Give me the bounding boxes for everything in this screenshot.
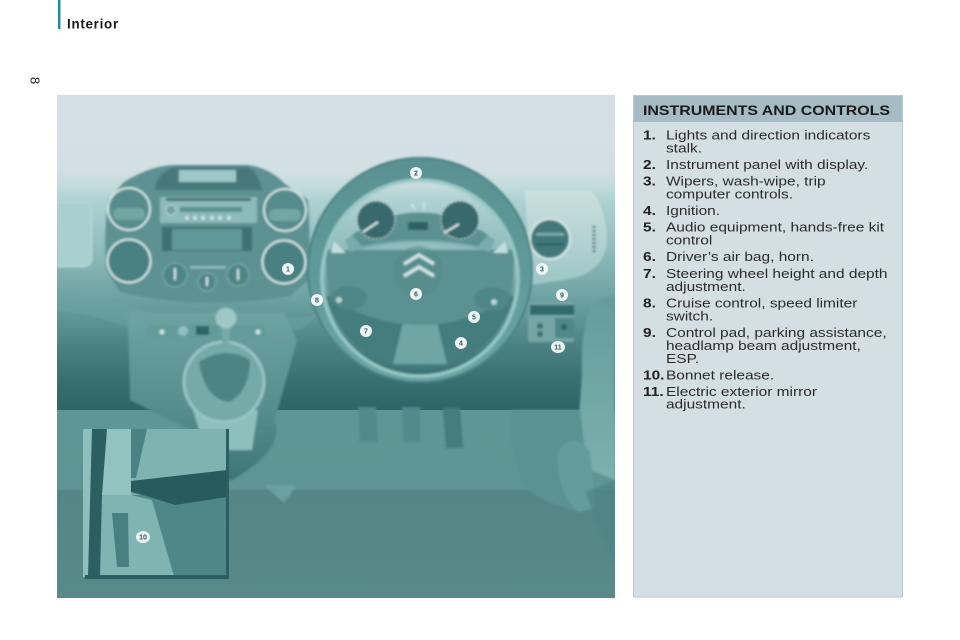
Citroën chevrons xyxy=(404,255,434,276)
stalk buttons xyxy=(331,286,510,311)
marker 10 xyxy=(136,531,150,543)
marker 9 xyxy=(556,289,568,301)
item 3: Wipers, wash-wipe, trip xyxy=(666,175,826,189)
top display xyxy=(155,167,262,190)
panel: instruments and controls xyxy=(634,96,902,597)
gear boot and knob xyxy=(184,308,264,450)
right door trim xyxy=(525,190,607,285)
marker 3: 3 xyxy=(540,266,544,274)
gear tunnel xyxy=(128,312,297,480)
marker 11 xyxy=(551,341,565,353)
panel header band xyxy=(634,96,902,122)
item 10: Bonnet release. xyxy=(666,369,774,383)
steering wheel lower spokes xyxy=(326,296,514,369)
page number: 8 xyxy=(28,77,42,84)
side vent xyxy=(530,219,594,259)
marker 1 xyxy=(282,263,294,275)
list of controls xyxy=(643,129,888,412)
item 7: 7. xyxy=(643,267,656,282)
item 3: computer controls. xyxy=(666,188,793,202)
item 9: Control pad, parking assistance, xyxy=(666,326,887,341)
section accent bar xyxy=(58,0,60,29)
instrument cluster xyxy=(345,201,495,252)
marker 10: 10 xyxy=(139,534,147,542)
item 9: ESP. xyxy=(666,352,699,367)
floor xyxy=(57,410,615,598)
item 6: Driver’s air bag, horn. xyxy=(666,250,814,265)
steering wheel highlight xyxy=(322,180,518,376)
marker 8: 8 xyxy=(315,298,319,304)
item 5: Audio equipment, hands-free kit xyxy=(666,221,884,235)
marker 5 xyxy=(468,311,480,323)
marker 2 xyxy=(410,167,422,179)
illustration background xyxy=(57,95,615,410)
centre console xyxy=(105,165,309,302)
marker 7: 7 xyxy=(364,328,368,336)
marker 8 xyxy=(311,294,323,306)
control switches row xyxy=(147,325,265,338)
marker 4 xyxy=(455,337,467,349)
item 8: 8. xyxy=(643,297,656,311)
item 5: control xyxy=(666,234,712,248)
item 9: 9. xyxy=(643,326,656,341)
radio xyxy=(160,197,257,223)
illustration artwork xyxy=(57,156,615,512)
floor wedge xyxy=(586,481,614,509)
vents xyxy=(108,188,150,230)
item 2: Instrument panel with display. xyxy=(666,158,868,173)
item 1: stalk. xyxy=(666,142,702,156)
item 1 xyxy=(643,129,870,156)
steering wheel hub xyxy=(325,250,515,325)
item 5 xyxy=(643,221,884,248)
pedals xyxy=(358,407,463,448)
item 3: 3. xyxy=(643,175,656,189)
marker 11: 11 xyxy=(554,344,562,352)
item 11 xyxy=(643,385,817,412)
item 11: adjustment. xyxy=(666,398,746,412)
item 11: 11. xyxy=(643,385,664,400)
marker 6: 6 xyxy=(414,292,418,298)
dashboard illustration xyxy=(57,95,615,598)
item 7 xyxy=(643,267,888,295)
item 3 xyxy=(643,175,826,202)
inset door photo xyxy=(83,429,229,579)
item 5: 5. xyxy=(643,221,656,235)
steering wheel centre spoke xyxy=(393,322,447,364)
steering wheel outer edge xyxy=(308,158,532,382)
callout markers xyxy=(136,167,568,543)
marker 1: 1 xyxy=(286,266,290,274)
section title: Interior: Interior xyxy=(67,16,119,32)
marker 3 xyxy=(536,263,548,275)
item 11: Electric exterior mirror xyxy=(666,385,817,400)
heater controls xyxy=(163,263,187,287)
item 1: Lights and direction indicators xyxy=(666,129,870,143)
marker 7 xyxy=(360,325,372,337)
item 9 xyxy=(643,326,887,367)
item 4: 4. xyxy=(643,204,656,219)
item 8: switch. xyxy=(666,310,713,324)
item 9: headlamp beam adjustment, xyxy=(666,339,861,354)
marker 4: 4 xyxy=(459,340,463,348)
panel body xyxy=(634,96,902,597)
right footwell panel xyxy=(512,409,584,510)
marker 5: 5 xyxy=(472,314,476,322)
dashboard lower band xyxy=(122,320,306,330)
panel heading: INSTRUMENTS AND CONTROLS xyxy=(643,103,890,119)
marker 2: 2 xyxy=(414,170,418,178)
item 4: Ignition. xyxy=(666,204,720,219)
item 6: 6. xyxy=(643,250,656,265)
switch panel xyxy=(528,302,574,342)
right lower trim xyxy=(578,295,615,480)
storage slot xyxy=(162,227,252,251)
steering wheel rim xyxy=(307,157,533,383)
airbag hub circle xyxy=(406,246,430,251)
item 7: adjustment. xyxy=(666,280,746,295)
marker 9: 9 xyxy=(560,292,564,300)
item 10: 10. xyxy=(643,369,664,383)
item 8 xyxy=(643,297,858,324)
glove box outline xyxy=(57,212,94,268)
marker 6 xyxy=(410,288,422,300)
spoke triangles xyxy=(331,241,346,253)
floor crease xyxy=(264,485,297,503)
item 7: Steering wheel height and depth xyxy=(666,267,888,282)
item 1: 1. xyxy=(643,129,656,143)
item 8: Cruise control, speed limiter xyxy=(666,297,858,311)
item 2: 2. xyxy=(643,158,656,173)
